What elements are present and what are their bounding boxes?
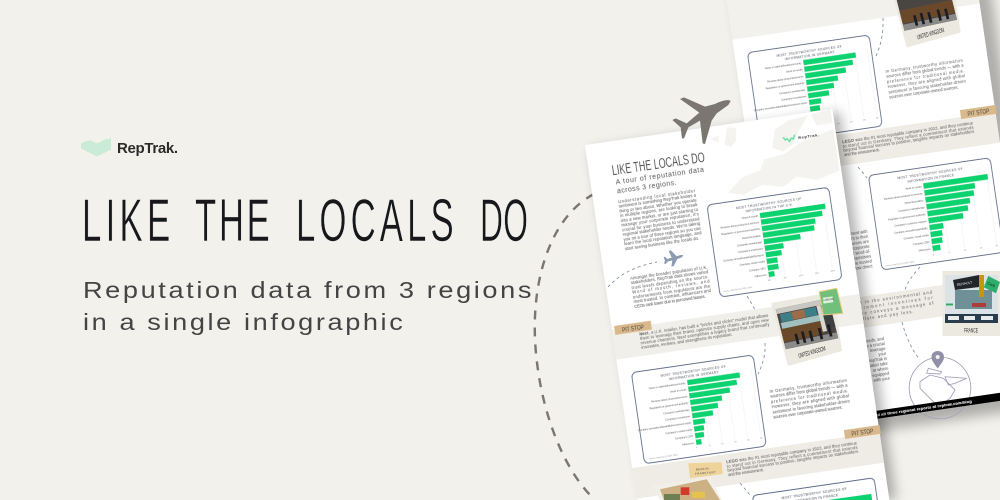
U.K. stakeholders paragraph: stakeholders, RepTrak data shows varied <box>631 269 709 285</box>
Renault band <box>772 285 949 341</box>
Next band: innovates, evolves, and strengthens its reputation. <box>641 332 733 350</box>
RepTrak logo: RepTrak. <box>117 140 178 157</box>
U.K. chart panel: Company annual/sustainability/report <box>723 254 764 263</box>
Renault band: aligning with government incentives for <box>803 295 934 319</box>
Renault band: making consumers pollute and pay less. <box>804 309 914 330</box>
page subtitle: across 3 regions. <box>617 180 677 195</box>
LEGO band: and the environment. <box>844 147 880 157</box>
intro paragraph: crucial for your business to understand <box>622 216 700 232</box>
Germany chart panel: Company's social media <box>665 428 693 435</box>
Germany text: preference for traditional media. <box>887 68 965 84</box>
Germany text: In Germany, trustworthy information <box>769 378 848 394</box>
France paragraph right edge: stakeholder engagement with <box>814 229 868 241</box>
U.K. chart panel: Reviews about products & services <box>720 221 760 230</box>
France chart panel: Regulator or government authority <box>888 213 927 222</box>
Germany text: sources differ from global trends — with a <box>770 383 849 399</box>
Germany chart panel <box>629 355 766 464</box>
U.K. chart panel: News/Journalism <box>742 234 761 240</box>
Germany chart panel: 5 <box>709 445 711 447</box>
France chart panel: MOST TRUSTWORTHY SOURCES OF <box>897 167 963 180</box>
main title: THE <box>195 188 270 254</box>
closing paragraph right edge: ar where <box>872 366 889 373</box>
France chart first bar on front page <box>828 494 872 500</box>
U.K. chart panel: Corporate website/app <box>737 241 763 247</box>
main title: LOCALS <box>296 188 454 254</box>
front page: intro, U.K. and Germany <box>585 109 890 500</box>
U.K. chart panel: 15% <box>815 273 819 275</box>
closing paragraph right edge: with your <box>873 375 891 383</box>
top band <box>723 0 980 40</box>
Renault band: transmitting narrative conveys a message of <box>803 300 935 324</box>
pit stop tag <box>614 321 652 335</box>
France paragraph right edge: mouth narratives <box>840 254 871 263</box>
Germany chart panel: Word of mouth <box>786 69 803 74</box>
main title: LIKE <box>82 188 170 254</box>
pit stop tag <box>960 105 997 119</box>
page subtitle: A tour of reputation data <box>615 167 704 186</box>
page title: LIKE THE LOCALS DO <box>611 149 706 179</box>
France paragraph right edge <box>814 229 874 276</box>
footer black band: Read all three regional reports at reptrak.com/blog <box>869 399 973 418</box>
Germany chart panel: Word of mouth <box>670 389 687 394</box>
subtitle <box>83 278 531 335</box>
Germany chart panel: 10 <box>721 443 725 445</box>
pit stop tag: PIT STOP <box>851 429 874 438</box>
France chart panel: INFORMATION IN FRANCE <box>907 173 955 184</box>
subtitle: Reputation data from 3 regions <box>83 278 531 303</box>
France chart panel: Company's website/app <box>898 206 925 213</box>
Germany chart panel: 10 <box>837 123 841 125</box>
page subtitle <box>615 167 706 195</box>
U.K. chart panel: Company social media <box>740 260 766 267</box>
LEGO band: and the environment. <box>728 467 764 477</box>
intro paragraph: start seeing business like the locals do. <box>625 236 699 251</box>
France chart panel start <box>752 478 877 500</box>
LEGO band: LEGO was the #1 most reputable company in 2023, and they continue <box>842 120 974 144</box>
Germany text: sources over corporate-owned sources. <box>889 85 959 100</box>
France chart panel: Reviews about products & services <box>884 192 924 201</box>
France paragraph right edge: information sources are <box>826 239 870 250</box>
France chart panel: Company's customer support <box>894 220 927 228</box>
front page sheet <box>585 109 889 500</box>
France chart panel: Influencers <box>918 248 932 253</box>
subtitle: in a single infographic <box>83 310 403 335</box>
Germany chart panel: Company's employees <box>665 415 691 422</box>
U.K. stakeholders paragraph: endorsements from regulators are the <box>633 283 711 300</box>
Germany chart panel: Company annual/sustainability/investment report <box>638 422 692 433</box>
Germany chart panel: Regulators or government authority <box>649 402 689 411</box>
intro paragraph <box>618 188 703 251</box>
icon: large grey airplane <box>672 97 731 144</box>
Germany chart panel: MOST TRUSTWORTHY SOURCES OF <box>660 364 726 378</box>
U.K. chart panel: 20% <box>831 270 835 273</box>
store photo <box>776 298 838 349</box>
dashed flight path arc <box>535 194 594 497</box>
LEGO band: to stand out in Germany. They reflect a commitment that extends <box>726 445 858 469</box>
France chart panel <box>868 158 1000 270</box>
U.K. chart panel: Regulators or government authority <box>721 228 761 236</box>
U.K. chart panel: Source: RepTrak Q1 2023, 2024 <box>724 287 753 293</box>
Renault band: Renault's engagement in the environmental and <box>802 289 933 313</box>
Germany chart panel: INFORMATION IN GERMANY <box>784 50 836 61</box>
travel ticket <box>688 462 723 478</box>
Germany chart panel: Company annual/sustainability/investment report <box>754 102 808 113</box>
Germany text <box>769 378 852 420</box>
Next band: Next, a U.K. retailer, has built a "bricks and clicks" model that allows <box>639 313 768 337</box>
UK polaroid on back page <box>890 0 961 48</box>
Germany text: However, they are aligned with global <box>887 73 965 89</box>
Germany chart panel: 25 <box>760 437 763 440</box>
back page shadow <box>709 0 1000 442</box>
France paragraph right edge: overshadow direct <box>839 263 874 273</box>
Germany text: sentiment in favoring stakeholder-driven <box>772 398 851 415</box>
caption: UNITED KINGDOM <box>798 345 826 360</box>
closing paragraph right edge: ication take <box>867 361 889 369</box>
intro paragraph: thing or two about. Whether you operate <box>619 197 698 214</box>
LEGO band: to stand out in Germany. They reflect a commitment that extends <box>842 125 974 149</box>
France paragraph right edge: is more trusted <box>845 258 873 267</box>
France chart panel: 10 <box>964 250 967 252</box>
intro paragraph: regional stakeholder needs. We're taking <box>622 221 701 237</box>
Germany chart panel: Reviews about products/services <box>651 395 688 404</box>
Germany chart panel: Source: RepTrak Q1 2023, 2024 <box>649 454 679 461</box>
France chart panel: Company CEO <box>913 241 930 246</box>
icon: globe with pin <box>909 351 971 419</box>
U.K. chart panel: MOST TRUSTWORTHY SOURCES OF <box>736 197 802 210</box>
Germany chart panel: Company's employees <box>781 95 807 102</box>
icon: small blue plane <box>664 250 683 267</box>
Germany chart panel: 20 <box>747 439 750 442</box>
France chart panel: 0 <box>933 254 935 257</box>
Germany text: preference for traditional media. <box>771 388 849 404</box>
U.K. chart panel <box>707 187 842 297</box>
U.K. chart panel: Company's employees <box>738 247 764 254</box>
LEGO band <box>748 112 1000 179</box>
front page dashed route segments <box>608 262 765 495</box>
LEGO band: LEGO was the #1 most reputable company in 2023, and they continue <box>726 440 858 464</box>
Germany chart panel: Company's website/app <box>779 88 806 95</box>
LEGO polaroid with ticket <box>653 462 723 500</box>
U.K. stakeholders paragraph: Amongst the broader population of U.K. <box>630 265 708 281</box>
Next band <box>612 294 864 360</box>
closing paragraph right edge: RepTrak is <box>867 356 887 364</box>
U.K. chart panel: Word of mouth <box>742 215 759 220</box>
France polaroid with cafe tag: Café <box>987 280 997 289</box>
main title <box>82 188 528 255</box>
Germany chart panel: Company's CEO <box>675 435 693 441</box>
Next band: revenue channels. Next exemplifies a legacy brand that continually <box>640 322 771 346</box>
small RepTrak logo <box>783 131 819 142</box>
Germany chart panel: Reviews about products/services <box>767 75 804 84</box>
intro paragraph: in multiple regions, are looking to break <box>620 202 699 218</box>
main title: DO <box>480 189 528 255</box>
U.K. stakeholders paragraph <box>630 265 713 309</box>
UK polaroid with luggage tag <box>771 288 843 366</box>
U.K. stakeholders paragraph: CEOs rank lower due to perceived biases. <box>634 294 706 309</box>
pit stop tag: PIT STOP <box>622 325 644 334</box>
LEGO band <box>632 432 884 499</box>
back page dashed route segments <box>858 18 920 360</box>
U.K. chart panel: INFORMATION IN THE U.K. <box>745 203 794 214</box>
Germany chart panel <box>745 35 882 144</box>
intro paragraph: you on a tour of three regions so you can <box>623 226 702 242</box>
small RepTrak logo: RepTrak. <box>798 132 819 140</box>
U.K. chart panel: Company CEO <box>749 267 766 272</box>
travel ticket: BERLIN <box>696 466 709 471</box>
Germany chart panel: 25 <box>876 117 879 120</box>
travel ticket: FRANKFURT <box>695 470 716 476</box>
intro paragraph: learn the local reputation language, and <box>624 230 702 247</box>
Germany chart panel: Regulators or government authority <box>765 82 805 91</box>
France chart panel: 15 <box>980 247 983 250</box>
store photo <box>660 479 720 500</box>
Germany text: sources differ from global trends — with a <box>886 63 965 79</box>
front page shadow <box>591 112 896 500</box>
U.K. chart panel: 5% <box>784 277 787 280</box>
U.K. chart panel: Influencers <box>754 273 768 278</box>
France chart panel: Source: RepTrak Q1 2023, 2024 <box>886 261 915 267</box>
closing paragraph right edge: leverage <box>870 346 887 353</box>
pit stop tag <box>844 425 881 439</box>
luggage tag: LONDON <box>823 298 834 302</box>
France paragraph right edge: and the power of word-of- <box>824 248 871 260</box>
intro paragraph: Understanding local stakeholder <box>618 188 696 204</box>
France chart panel: 20 <box>996 245 999 247</box>
closing paragraph right edge: equipped <box>872 371 890 378</box>
intro paragraph: manage your corporate reputation, it's <box>621 212 699 228</box>
Germany chart panel: 15 <box>850 121 854 124</box>
U.K. chart panel: 0% <box>768 280 771 282</box>
LEGO band: beyond financial success to positive, tangible impacts on stakeholders <box>727 449 858 473</box>
Germany text: However, they are aligned with global <box>771 393 849 409</box>
Germany chart panel: 20 <box>863 119 866 122</box>
storefront photo: RENAULT <box>956 280 973 287</box>
France paragraph right edge: alignment to their <box>837 234 869 243</box>
Germany chart panel: News in national/local/community <box>649 382 686 390</box>
France paragraph right edge: in favor of corporate <box>833 244 871 254</box>
France polaroid with cafe tag <box>942 271 1000 336</box>
closing paragraph right edge <box>848 336 891 386</box>
Germany text: sentiment in favoring stakeholder-driven <box>888 78 967 95</box>
France chart panel: News/Journalism <box>905 199 924 205</box>
pit stop tag: PIT STOP <box>967 109 990 118</box>
Germany text: In Germany, trustworthy information <box>885 58 964 74</box>
Germany text <box>885 58 968 100</box>
back page: Germany and France <box>723 0 1000 432</box>
Europe map <box>709 109 841 198</box>
France polaroid with cafe tag: FRANCE <box>964 328 978 334</box>
Germany chart panel: News in national/local/community <box>765 62 802 70</box>
France chart panel: Word of mouth <box>905 185 922 191</box>
Germany chart panel: Influencers <box>682 442 695 446</box>
Germany chart panel: 15 <box>734 441 738 444</box>
intro paragraph: sentiment is something RepTrak knows a <box>618 193 697 209</box>
Next band: them to leverage their brand, optimize supply chains, and open new <box>640 317 769 341</box>
France chart panel: Company annual/sustainability <box>894 227 929 235</box>
Germany text: sources over corporate-owned sources. <box>773 405 843 420</box>
closing paragraph right edge: your <box>878 351 887 357</box>
intro paragraph: into a new market, or are just starting to <box>620 207 699 223</box>
France chart panel start: MOST TRUSTWORTHY SOURCES OF <box>781 487 847 500</box>
Germany chart panel: INFORMATION IN GERMANY <box>668 370 720 381</box>
U.K. stakeholders paragraph: trust levels depending on the source. <box>631 274 709 290</box>
U.K. stakeholders paragraph: Word of mouth, reviews, and <box>632 279 711 295</box>
LEGO band: beyond financial success to positive, tangible impacts on stakeholders <box>843 129 974 153</box>
Germany chart panel: MOST TRUSTWORTHY SOURCES OF <box>776 44 842 58</box>
RepTrak logo <box>82 138 178 157</box>
footer black band <box>788 377 1000 432</box>
U.K. stakeholders paragraph: most trusted. In contrast, influencers and <box>633 288 712 304</box>
France chart panel: Company social media <box>903 234 929 241</box>
France chart panel: 5 <box>949 252 951 254</box>
UK polaroid on back page: UNITED KINGDOM <box>916 27 945 41</box>
closing paragraph right edge: is a crucial <box>865 341 885 349</box>
closing paragraph right edge: regional needs, and <box>848 336 885 346</box>
Germany chart panel: 0 <box>696 447 698 449</box>
Germany chart panel: Company's website/app <box>663 408 690 415</box>
U.K. chart panel: 10% <box>799 275 804 277</box>
